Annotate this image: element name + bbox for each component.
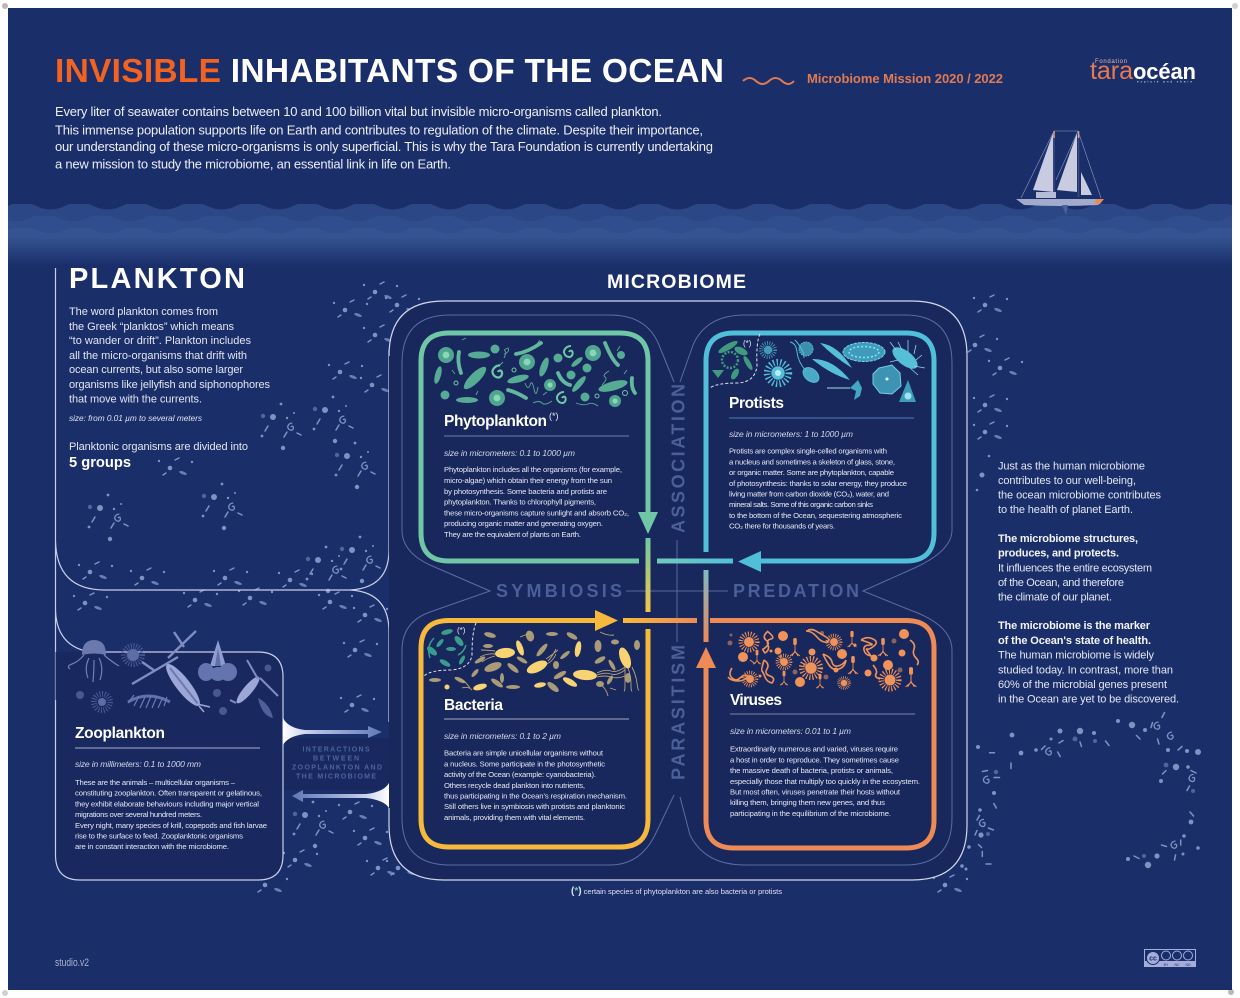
card outline and arrow [421, 610, 697, 847]
text: bacteria description: Bacteria are simple unicellular organisms without [444, 748, 604, 758]
plankton outline [56, 268, 389, 722]
text: plankton description: all the micro-organisms that drift with [69, 350, 247, 362]
panel: protists [657, 333, 934, 642]
text: phytoplankton description: producing organic matter and generating oxygen. [444, 519, 603, 528]
text: five groups [69, 441, 248, 471]
heading: zooplankton: Zooplankton [75, 725, 165, 742]
text: ocean microbiome explanation: studied today. In contrast, more than [998, 664, 1173, 676]
text: ocean microbiome explanation: of the Ocean, and therefore [998, 577, 1124, 589]
text: viruses description: a host in order to reproduce. They sometimes cause [730, 756, 899, 764]
icon: creative commons badge: NC [1174, 963, 1180, 967]
text: phytoplankton description: micro-algae) which obtain their energy from the sun [444, 476, 612, 485]
text: ocean microbiome explanation: produces, and protects. [998, 548, 1119, 560]
intro text: Every liter of seawater contains between 10 and 100 billion vital but invisible micro-organisms called plankton. [55, 104, 662, 119]
card outline and arrow [696, 620, 934, 848]
title: INVISIBLE INHABITANTS OF THE OCEAN [55, 53, 724, 90]
text: protists description: to the bottom of the Ocean, sequestering atmospheric [729, 511, 902, 520]
text: ocean microbiome explanation: the ocean microbiome contributes [998, 490, 1162, 502]
icon: bacteria organisms: (*) [457, 626, 466, 635]
intro text: This immense population supports life on Earth and contributes to regulation of the climate. Despite their importance, [55, 122, 703, 138]
icon: creative commons badge: ND [1185, 963, 1191, 967]
text: zooplankton description [75, 778, 267, 851]
text: viruses description: the massive death of bacteria, protists or animals, [730, 766, 893, 775]
text: plankton description: “to wander or drift”. Plankton includes [69, 335, 252, 347]
inner cross outline [402, 315, 952, 865]
text: interactions label: BETWEEN [313, 756, 359, 762]
text: zooplankton description: rise to the surface to feed. Zooplanktonic organisms [75, 832, 243, 840]
label: predation: PREDATION [733, 581, 859, 601]
text: plankton description [69, 306, 270, 406]
heading: plankton: PLANKTON [69, 263, 245, 295]
label: symbiosis: SYMBIOSIS [496, 581, 622, 601]
heading: phytoplankton: Phytoplankton [444, 413, 547, 430]
label: association: ASSOCIATION [668, 384, 688, 533]
text: bacteria description: Others recycle dead plankton into nutrients, [444, 781, 585, 790]
text: plankton description: organisms like jellyfish and siphonophores [69, 379, 270, 391]
text: zooplankton description: are in constant interaction with the microbiome. [75, 842, 229, 851]
text: phytoplankton description: phytoplankton. Thanks to chlorophyll pigments, [444, 498, 596, 506]
heading: bacteria: Bacteria [444, 697, 503, 714]
text: plankton description: ocean currents, but also some larger [69, 364, 243, 376]
text: ocean microbiome explanation: 60% of the microbial genes present [998, 679, 1167, 691]
text: interactions label: ZOOPLANKTON AND [292, 764, 382, 772]
size: phytoplankton: size in micrometers: 0.1 to 1000 µm [444, 448, 575, 458]
intro text: our understanding of these micro-organisms is only superficial. This is why the Tara Foundation is currently undertaking [55, 139, 713, 154]
thin cross lines [626, 540, 728, 642]
text: viruses description [730, 744, 920, 818]
icon: creative commons badge: BY [1164, 963, 1169, 967]
text: ocean microbiome explanation: of the Ocean's state of health. [998, 635, 1151, 647]
text: ocean microbiome explanation: the climate of our planet. [998, 592, 1112, 604]
sea waves band [8, 204, 1232, 266]
logo: Fondation Tara Ocean: océan [1133, 59, 1196, 84]
size: plankton: size: from 0.01 µm to several meters [69, 413, 202, 423]
size: protists: size in micrometers: 1 to 1000 µm [729, 429, 853, 439]
panel: viruses [696, 620, 934, 848]
text: viruses description: participating in the equilibrium of the microbiome. [730, 809, 891, 818]
text: protists description: CO₂ there for thousands of years. [729, 522, 835, 530]
text: five groups: Planktonic organisms are divided into [69, 441, 248, 453]
icon: zooplankton organisms [68, 631, 278, 718]
icon: bacteria organisms [424, 623, 640, 696]
logo: Fondation Tara Ocean: explore and share [1137, 80, 1192, 84]
background plankton speckles [73, 282, 1201, 893]
text: plankton description: that move with the currents. [69, 394, 202, 406]
wave icon [743, 78, 794, 84]
text: zooplankton description: These are the animals – multicellular organisms – [75, 778, 236, 787]
card outline and arrow [657, 333, 934, 642]
mission label: Microbiome Mission 2020 / 2022 [807, 71, 1003, 86]
text: zooplankton description: migrations over several hundred meters. [75, 810, 202, 819]
speckles: lower right arc [960, 719, 1201, 870]
text: ocean microbiome explanation: It influences the entire ecosystem [998, 562, 1152, 574]
text: viruses description: But most often, viruses penetrate their hosts without [730, 788, 901, 796]
text: protists description: or organic matter. Some are phytoplankton, capable [729, 468, 894, 477]
text: bacteria description: thus participating in the Ocean’s respiration mechanism. [444, 792, 627, 800]
text: plankton description: the Greek “planktos” which means [69, 321, 234, 333]
card outline and arrow [421, 333, 658, 612]
text: ocean microbiome explanation: The microbiome is the marker [998, 620, 1151, 632]
text: five groups: 5 groups [69, 455, 131, 471]
text: ocean microbiome explanation: contributes to our well-being, [998, 475, 1136, 487]
arrow: zooplankton to microbiome [283, 718, 382, 745]
text: bacteria description: Still others live in symbiosis with protists and planktonic [444, 802, 625, 811]
text: zooplankton description: constituting zooplankton. Often transparent or gelatinous, [75, 788, 262, 798]
text: phytoplankton description: these micro-organisms capture sunlight and absorb CO₂, [444, 508, 629, 518]
icon: sailboat [1016, 131, 1104, 215]
icon: protist organisms [710, 334, 925, 402]
text: viruses description: especially those that multiply too quickly in the ecosystem. [730, 777, 920, 786]
size: bacteria: size in micrometers: 0.1 to 2 µm [444, 731, 561, 741]
text: interactions label [292, 746, 382, 780]
logo: Fondation Tara Ocean: tara [1090, 57, 1133, 85]
text: bacteria description: a nucleus. Some participate in the photosynthetic [444, 760, 605, 768]
text: bacteria description: animals, providing them with vital elements. [444, 813, 585, 822]
panel: phytoplankton [421, 333, 658, 612]
text: viruses description: killing them, bringing them new genes, and thus [730, 798, 885, 807]
text: protists description [729, 446, 907, 530]
credit: studio.v2: studio.v2 [55, 957, 89, 969]
text: ocean microbiome explanation: The human microbiome is widely [998, 650, 1154, 662]
panel: bacteria [421, 610, 697, 847]
intro text [55, 104, 713, 172]
text: phytoplankton description: Phytoplankton includes all the organisms (for example, [444, 465, 622, 474]
footnote: (*) certain species of phytoplankton are also bacteria or protists [571, 886, 782, 897]
intro text: a new mission to study the microbiome, an essential link in life on Earth. [55, 156, 451, 172]
text: ocean microbiome explanation [998, 460, 1179, 706]
size: zooplankton: size in millimeters: 0.1 to 1000 mm [75, 759, 201, 769]
text: protists description: Protists are complex single-celled organisms with [729, 446, 887, 456]
icon: protist organisms: (*) [743, 339, 752, 348]
text: protists description: of photosynthesis: thanks to solar energy, they produce [729, 479, 907, 488]
arrow: microbiome to zooplankton [292, 783, 389, 808]
icon: virus organisms [728, 629, 918, 689]
text: protists description: living matter from carbon dioxide (CO₂), water, and [729, 490, 889, 498]
label: parasitism: PARASITISM [668, 645, 688, 780]
text: protists description: mineral salts. Some of this organic carbon sinks [729, 500, 873, 509]
text: ocean microbiome explanation: The microbiome structures, [998, 533, 1138, 545]
text: plankton description: The word plankton comes from [69, 306, 218, 318]
icon: phytoplankton organisms [433, 338, 635, 407]
size: viruses: size in micrometers: 0.01 to 1 µm [730, 726, 851, 736]
text: phytoplankton description: They are the equivalent of plants on Earth. [444, 530, 581, 539]
icon: creative commons badge [1144, 949, 1196, 967]
text: ocean microbiome explanation: in the Ocean are yet to be discovered. [998, 694, 1179, 706]
text: phytoplankton description: by photosynthesis. Some bacteria and protists are [444, 487, 607, 496]
text: protists description: a nucleus and sometimes a skeleton of glass, stone, [729, 458, 895, 466]
logo: Fondation Tara Ocean [1090, 57, 1196, 85]
heading: viruses: Viruses [730, 692, 782, 709]
text: interactions label: INTERACTIONS [302, 746, 370, 754]
text: viruses description: Extraordinarily numerous and varied, viruses require [730, 744, 898, 754]
logo: Fondation Tara Ocean: Fondation [1095, 59, 1127, 65]
text: interactions label: THE MICROBIOME [296, 774, 376, 780]
text: ocean microbiome explanation: to the health of planet Earth. [998, 504, 1133, 516]
icon: creative commons badge: cc [1149, 956, 1157, 962]
heading: phytoplankton: (*) [549, 411, 558, 421]
panel: microbiome [389, 271, 967, 880]
text: ocean microbiome explanation: Just as the human microbiome [998, 460, 1145, 472]
heading: microbiome: MICROBIOME [607, 271, 746, 293]
zooplankton link dark band [283, 738, 401, 790]
panel: zooplankton [56, 631, 283, 880]
text: phytoplankton description [444, 465, 629, 539]
heading: protists: Protists [729, 395, 784, 412]
text: zooplankton description: they exhibit elaborate behaviours including major vertical [75, 800, 259, 808]
text: zooplankton description: Every night, many species of krill, copepods and fish larvae [75, 821, 267, 830]
text: bacteria description [444, 748, 627, 822]
text: bacteria description: activity of the Ocean (example: cyanobacteria). [444, 770, 596, 779]
